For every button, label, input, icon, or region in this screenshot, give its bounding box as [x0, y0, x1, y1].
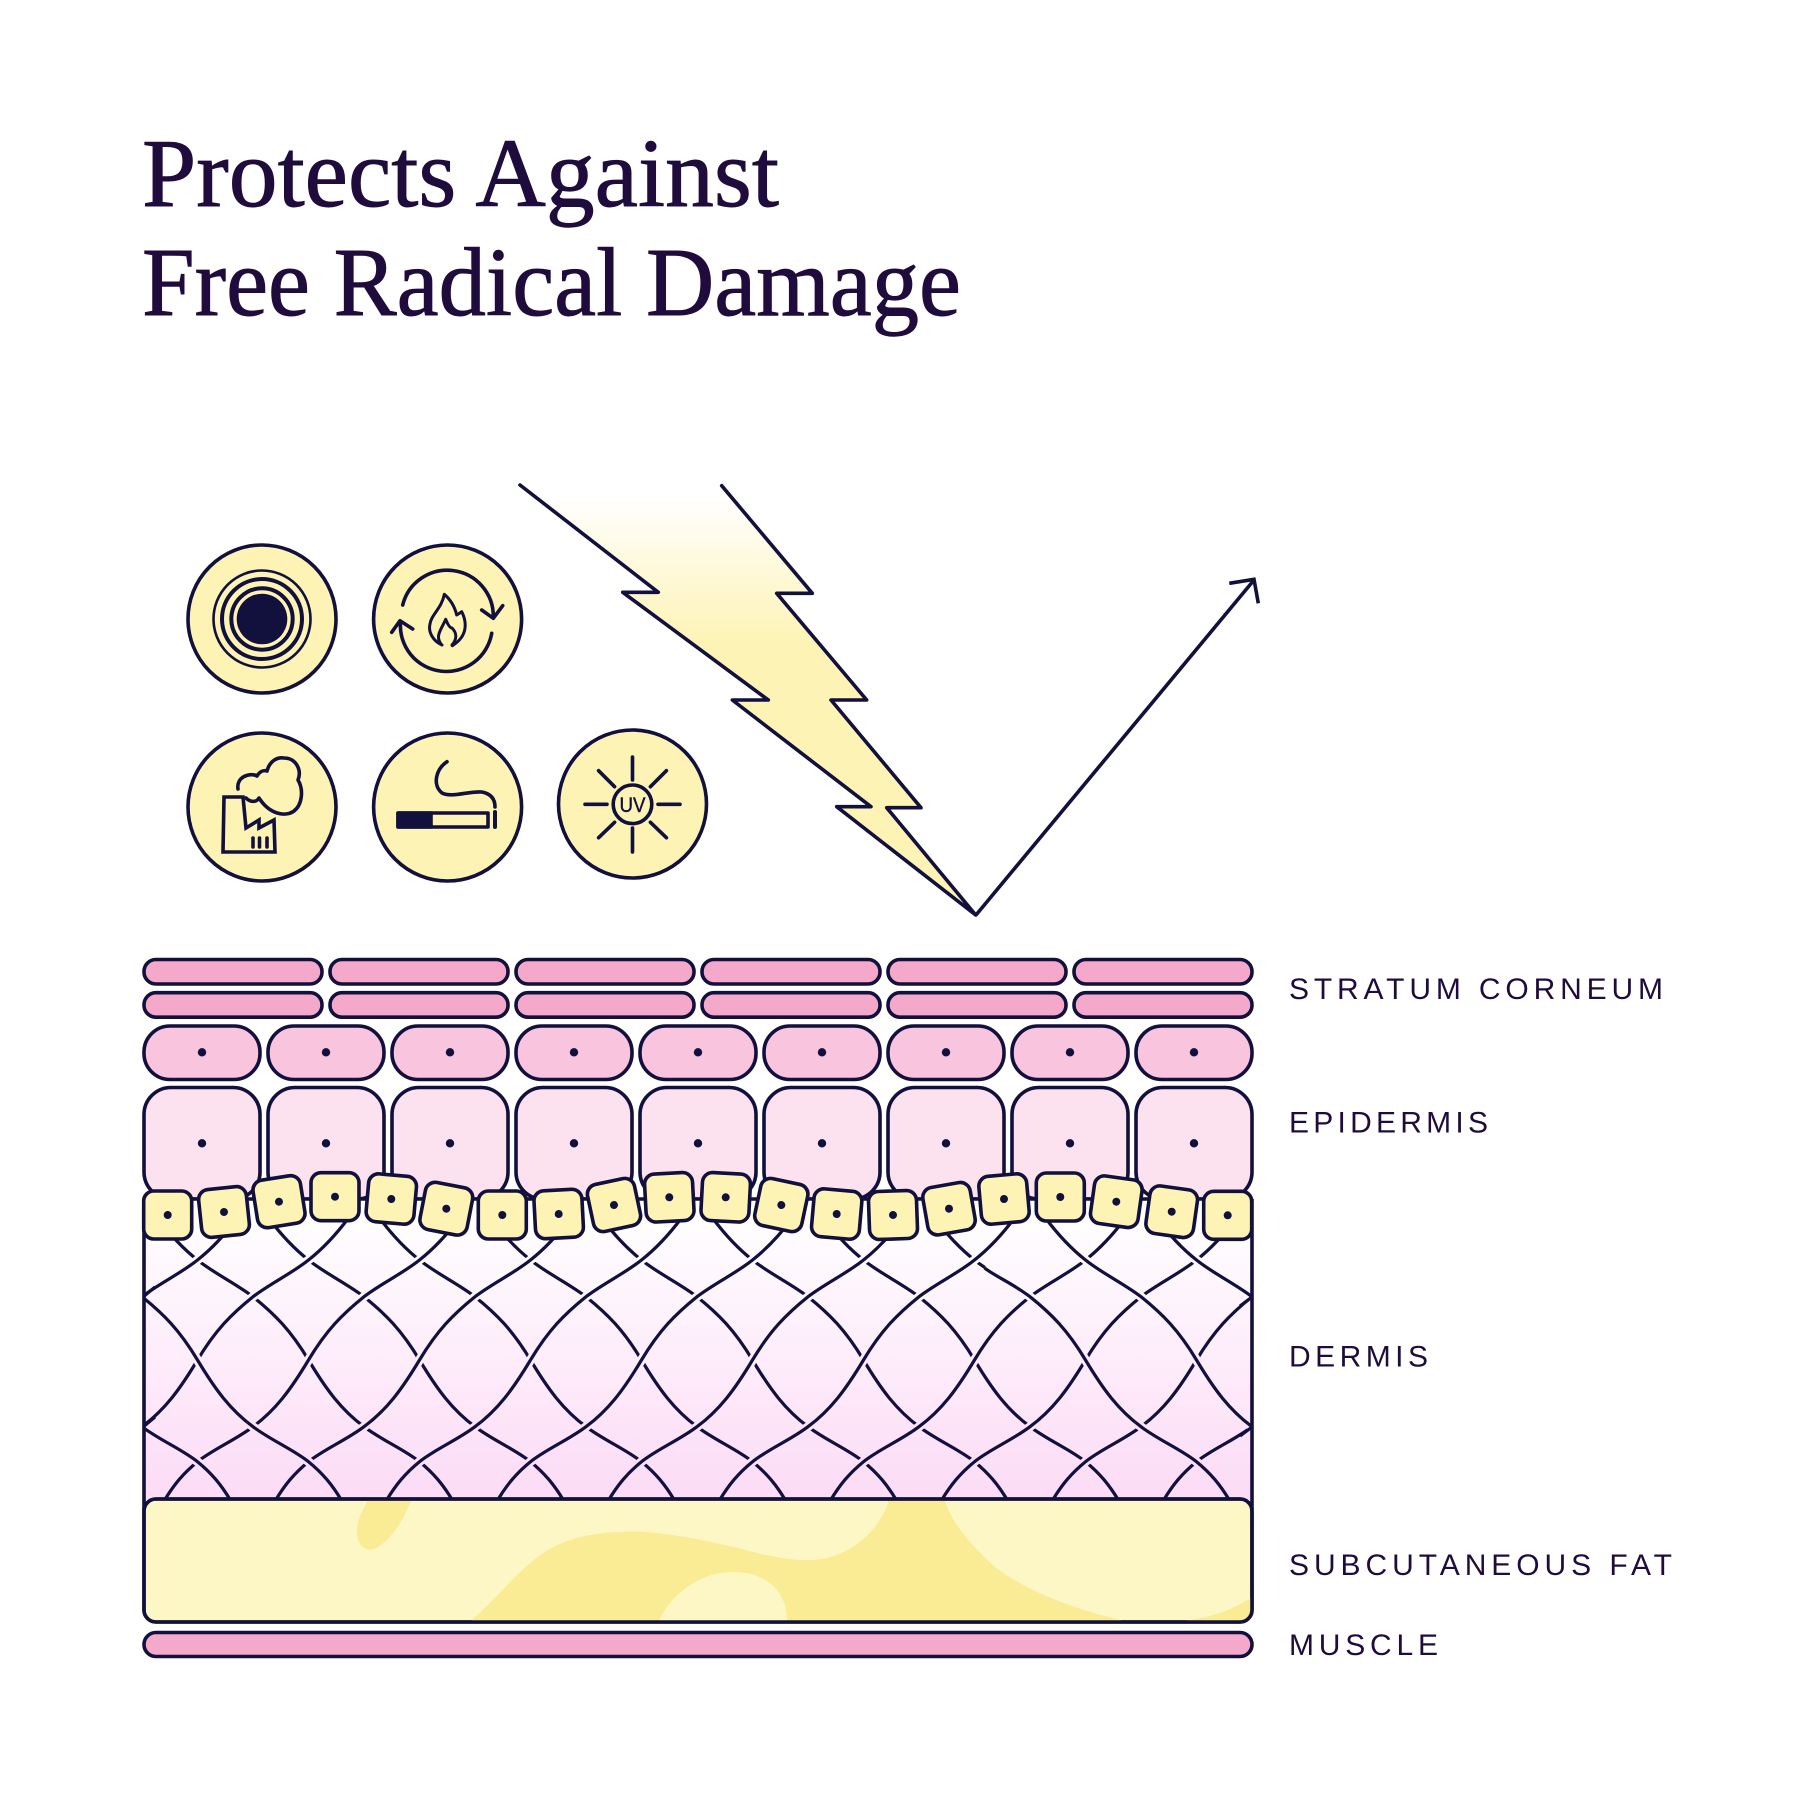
dermis side borders	[144, 1199, 1252, 1510]
layer: lower epidermis nuclei	[198, 1139, 1198, 1148]
title: Protects Against	[142, 120, 779, 228]
title: Free Radical Damage	[142, 229, 961, 337]
icon: black hole rings	[188, 545, 336, 693]
layer: upper epidermis nuclei	[198, 1048, 1198, 1057]
skin cross-section	[142, 958, 1254, 1658]
title	[142, 120, 961, 337]
layer: basal keratinocyte cells	[144, 1172, 1252, 1240]
icon: factory smoke	[188, 733, 336, 881]
layer: upper epidermis cells	[144, 1026, 1252, 1080]
label: stratum corneum: STRATUM CORNEUM	[1289, 973, 1663, 1006]
layer: stratum corneum cells	[144, 960, 1252, 1017]
arrow: reflected ray	[976, 579, 1258, 915]
layer: lower epidermis cells	[144, 1088, 1252, 1199]
icon: UV sun	[558, 730, 706, 878]
label: epidermis: EPIDERMIS	[1289, 1107, 1488, 1140]
icon: flame with cycle arrows	[374, 545, 522, 693]
icon: cigarette	[374, 733, 522, 881]
lightning bolt	[520, 485, 976, 915]
label: muscle: MUSCLE	[1289, 1629, 1438, 1662]
layer: dermis background	[144, 1199, 1252, 1500]
layer labels	[1289, 973, 1672, 1662]
label: dermis: DERMIS	[1289, 1341, 1428, 1374]
layer: subcutaneous fat	[144, 1499, 1252, 1622]
icons: free radical sources	[188, 545, 706, 881]
dermis collagen mesh	[146, 1222, 1250, 1498]
label: subcutaneous fat: SUBCUTANEOUS FAT	[1289, 1549, 1672, 1582]
layer: muscle	[144, 1632, 1252, 1656]
icon: UV sun: UV	[620, 794, 646, 817]
